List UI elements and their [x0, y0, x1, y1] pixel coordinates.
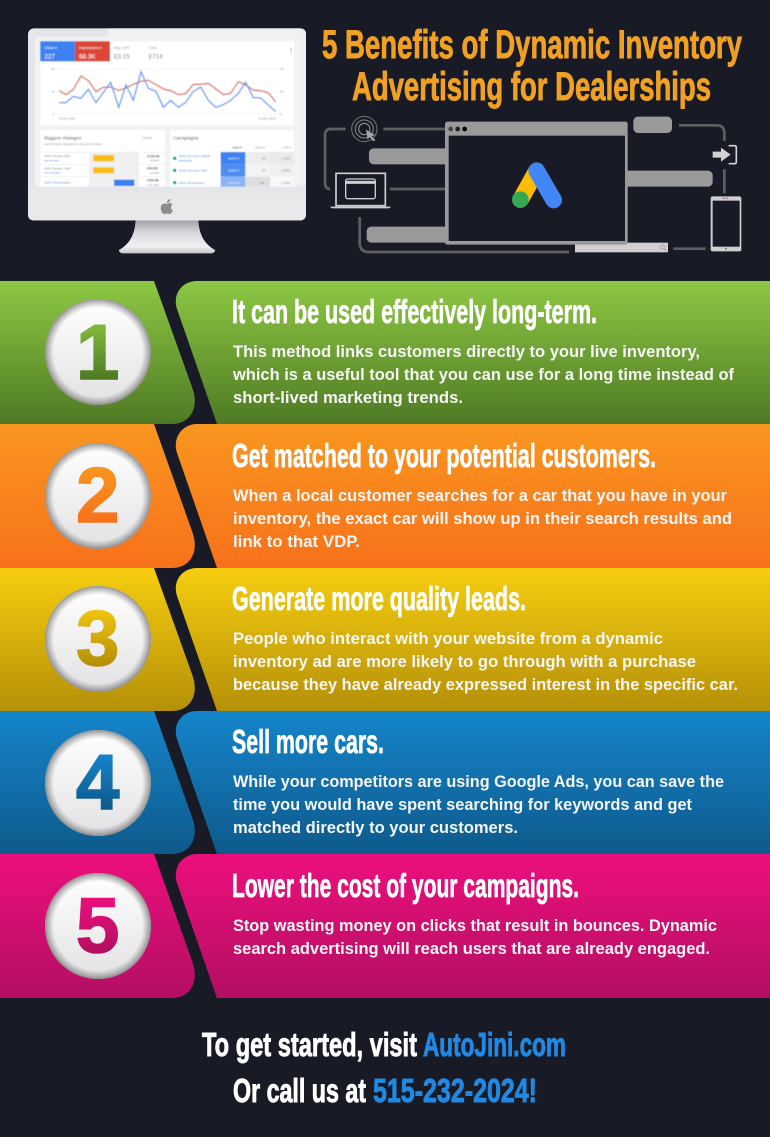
benefit band 4 — [0, 711, 770, 854]
clicks tab: Clicks ▾ — [44, 46, 57, 50]
content panel — [176, 281, 770, 424]
biggest changes panel: Last 30 days compared to the prior 30 days — [44, 142, 102, 146]
benefit band 5 — [0, 854, 770, 998]
body text — [233, 772, 724, 837]
number badge — [45, 299, 151, 405]
biggest changes panel — [40, 130, 165, 187]
campaigns panel: Clicks ▾ — [255, 146, 266, 150]
body text — [233, 486, 732, 551]
body text: link to that VDP. — [233, 532, 360, 551]
biggest changes panel: +347.60% — [147, 183, 160, 187]
biggest changes panel: -65.68% — [149, 171, 160, 175]
connector lines — [325, 125, 724, 252]
chart panel — [40, 41, 294, 125]
google ads logo — [512, 171, 554, 208]
body text: matched directly to your customers. — [233, 818, 518, 837]
heading: Lower the cost of your campaigns. — [232, 867, 579, 904]
campaigns panel: 2018 | Services | SEO — [179, 169, 209, 173]
line chart — [51, 67, 284, 121]
target cursor icon — [352, 116, 377, 142]
clicks tab: 227 — [44, 54, 55, 61]
search bar — [575, 243, 668, 252]
campaigns panel: 1.75% — [282, 156, 290, 160]
body text: inventory ad are more likely to go through with a purchase — [233, 652, 696, 671]
menu dots: ⋮ — [288, 47, 294, 54]
campaigns panel: 2018 | Services | Digital — [179, 154, 210, 158]
line chart: 4K — [280, 67, 284, 71]
body text: because they have already expressed interest in the specific car. — [233, 675, 738, 694]
monitor chin — [28, 188, 306, 220]
body text: People who interact with your website from a dynamic — [233, 629, 663, 648]
biggest changes panel: Biggest changes — [44, 135, 82, 141]
content panel — [176, 568, 770, 711]
body text — [233, 629, 738, 694]
line chart: 25 Apr 2018 — [59, 117, 75, 121]
number badge: 2 — [76, 451, 119, 539]
number badge — [45, 730, 151, 836]
campaigns panel: 2018 | Remarketing — [179, 181, 205, 185]
campaigns panel: £164.71 — [229, 156, 240, 160]
campaigns panel: £127.13 — [229, 181, 240, 185]
body text: short-lived marketing trends. — [233, 388, 463, 407]
browser window — [445, 122, 628, 245]
visit line: AutoJini.com — [423, 1026, 566, 1063]
call line — [233, 1072, 537, 1109]
campaigns panel: Cost ▾ — [233, 146, 242, 150]
clicks tab — [40, 41, 75, 61]
line chart: 20 — [51, 67, 55, 71]
line chart: 0 — [53, 112, 55, 116]
campaigns panel: £235.17 — [229, 169, 240, 173]
benefit band 2 — [0, 424, 770, 568]
number panel — [0, 711, 195, 854]
body text: This method links customers directly to your live inventory, — [233, 342, 700, 361]
campaigns panel: 0.80% — [282, 169, 290, 173]
cost stat: Cost — [149, 46, 156, 50]
apple logo — [161, 199, 173, 214]
campaigns panel: Marketing — [179, 159, 192, 163]
call line: Or call us at — [233, 1072, 366, 1109]
bezel highlight — [107, 28, 306, 186]
biggest changes panel: seo services — [44, 158, 60, 162]
number badge: 3 — [76, 594, 119, 682]
body text: inventory, the exact car will show up in their search results and — [233, 509, 732, 528]
number badge: 5 — [76, 881, 119, 969]
number panel — [0, 854, 195, 998]
body text — [232, 342, 734, 407]
biggest changes panel: Cost ▾ — [142, 136, 152, 140]
biggest changes panel: seo company — [44, 172, 61, 175]
body text — [233, 916, 717, 958]
biggest changes panel: 2018 | Services | SEO — [44, 166, 70, 170]
avg cpc stat: Avg. CPC — [114, 46, 130, 50]
number badge: 1 — [76, 308, 119, 396]
avg cpc stat: £3.15 — [114, 54, 130, 61]
line chart: 0 — [280, 112, 282, 116]
biggest changes panel: +£90.56 — [146, 179, 159, 183]
number panel — [0, 424, 195, 568]
phone icon — [711, 196, 741, 251]
campaigns panel: 26 — [262, 169, 266, 173]
monitor with analytics dashboard — [28, 28, 306, 253]
heading: Generate more quality leads. — [232, 580, 526, 617]
call line: 515-232-2024! — [373, 1072, 537, 1109]
impressions tab: 68.3K — [79, 54, 96, 61]
number badge — [45, 586, 151, 692]
avg cpc stat — [114, 46, 130, 61]
grey bars — [367, 117, 713, 243]
body text: While your competitors are using Google Ads, you can save the — [233, 772, 724, 791]
body text: search advertising will reach users that are already engaged. — [233, 939, 710, 958]
benefit band 1 — [0, 281, 770, 424]
impressions tab: Impressions ▾ — [79, 46, 102, 50]
campaigns panel: CTR ▾ — [283, 146, 292, 150]
visit line: To get started, visit — [202, 1026, 417, 1063]
campaigns panel: 55 — [262, 156, 266, 160]
google ads network illustration — [325, 116, 741, 252]
cost stat: £714 — [149, 54, 163, 61]
number badge — [45, 873, 151, 979]
call to action footer — [202, 1026, 566, 1109]
impressions tab — [75, 41, 110, 61]
content panel — [176, 854, 770, 998]
number badge: 4 — [76, 738, 119, 826]
number panel — [0, 568, 195, 711]
biggest changes panel: -£105.56 — [146, 154, 160, 158]
monitor body — [28, 28, 306, 220]
content panel — [176, 424, 770, 568]
campaigns panel: Campaigns — [173, 135, 199, 141]
monitor stand — [119, 219, 215, 253]
body text: time you would have spent searching for keywords and get — [233, 795, 692, 814]
body text: When a local customer searches for a car that you have in your — [233, 486, 727, 505]
number panel — [0, 281, 195, 424]
biggest changes panel: 2018 | Remarketing — [44, 181, 71, 185]
line chart: 19 May 2018 — [258, 117, 276, 121]
biggest changes panel: 2018 | Services | SEO — [44, 154, 70, 158]
line chart: 2K — [280, 90, 284, 94]
campaigns panel: 104 — [259, 181, 265, 185]
biggest changes panel: -66.58% — [149, 159, 160, 163]
content panel — [176, 711, 770, 854]
body text: which is a useful tool that you can use for a long time instead of — [232, 365, 734, 384]
benefit band 3 — [0, 568, 770, 711]
screen — [35, 37, 298, 187]
biggest changes panel: -£94.89 — [146, 167, 158, 171]
line chart: 10 — [51, 90, 55, 94]
title — [322, 23, 743, 109]
body text: Stop wasting money on clicks that result in bounces. Dynamic — [233, 916, 717, 935]
campaigns panel: 0.20% — [282, 181, 290, 185]
login arrow icon — [713, 146, 736, 164]
number badge — [45, 443, 151, 549]
heading: Sell more cars. — [232, 723, 384, 760]
laptop icon — [330, 173, 391, 208]
cost stat — [149, 46, 163, 61]
campaigns panel — [170, 130, 294, 187]
